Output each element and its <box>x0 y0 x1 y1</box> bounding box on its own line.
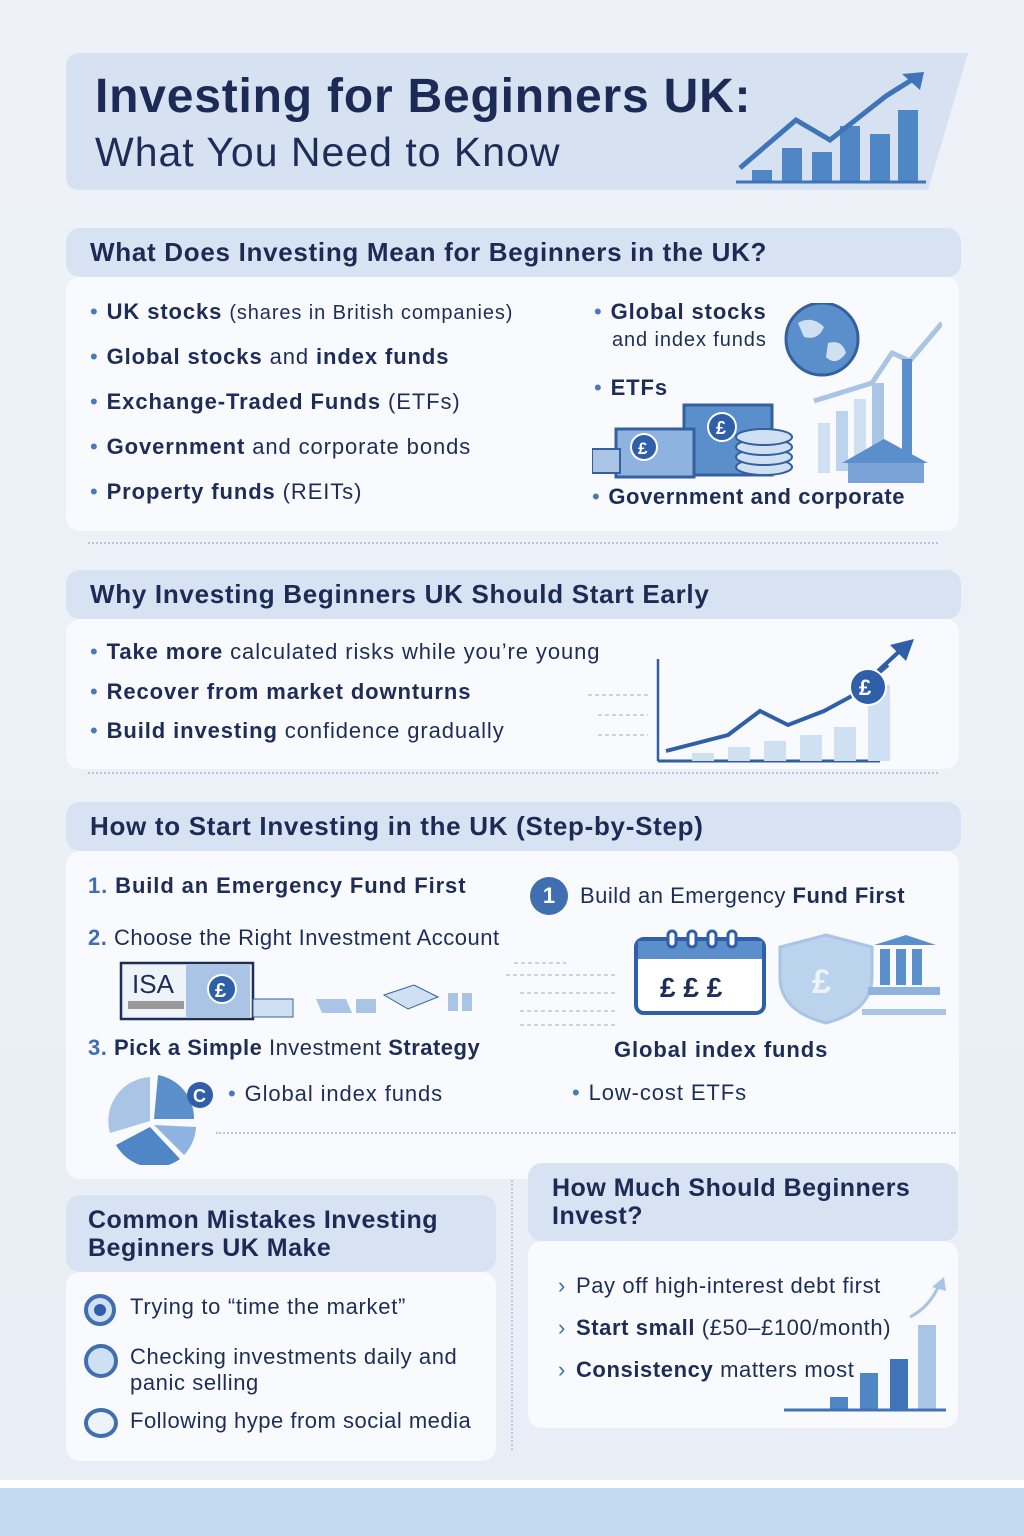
bullet list: • Take more calculated risks while you’re young <box>90 639 600 664</box>
bullet list: • Build investing confidence gradually <box>90 718 505 743</box>
bullet list: • UK stocks (shares in British companies) <box>90 299 513 324</box>
icon: calendar, shield, bank: £ <box>812 963 831 1001</box>
icon: clock <box>84 1344 118 1378</box>
panel: mistakes list: panic selling <box>130 1370 259 1395</box>
step 3: 3. Pick a Simple Investment Strategy <box>88 1035 480 1060</box>
illustration: globe, cash, bank: £ <box>638 439 648 458</box>
icon: bar chart <box>784 1277 946 1412</box>
bullet list: • Recover from market downturns <box>90 679 471 704</box>
bullet list <box>90 639 600 743</box>
step 1 badge <box>530 877 905 915</box>
section 1 header: What Does Investing Mean for Beginners in the UK? <box>90 237 767 267</box>
section 2 header: Why Investing Beginners UK Should Start Early <box>90 579 709 609</box>
panel: how much list: › Start small (£50–£100/month) <box>558 1315 891 1340</box>
how much header: How Much Should Beginners <box>552 1174 910 1202</box>
panel: mistakes list: Following hype from social media <box>130 1408 471 1433</box>
icon: eye <box>84 1294 116 1326</box>
panel: investing meaning: • ETFs <box>594 375 668 400</box>
how much header: Invest? <box>552 1202 643 1230</box>
illustration: globe, cash, bank: £ <box>716 418 726 438</box>
icon: calendar, shield, bank: £ £ £ <box>660 972 723 1003</box>
right labels: • Global stocks <box>594 299 767 324</box>
mistakes header <box>66 1195 496 1272</box>
panel: steps <box>66 851 959 1179</box>
step 1: 1. Build an Emergency Fund First <box>88 873 466 898</box>
growth chart: £ <box>859 675 872 700</box>
icon: pie chart <box>108 1075 213 1165</box>
icon: ISA card: £ <box>215 980 226 1002</box>
panel: mistakes list: Trying to “time the market” <box>130 1294 406 1319</box>
icon: ISA card: ISA <box>132 969 175 999</box>
icon: chat <box>84 1408 118 1438</box>
footer band <box>0 1480 1024 1488</box>
title: Investing for Beginners UK: <box>95 70 751 123</box>
section 3 header <box>66 802 961 851</box>
panel: steps: • Low-cost ETFs <box>572 1080 747 1105</box>
section 4: mistakes <box>66 1195 496 1461</box>
bullet list: • Property funds (REITs) <box>90 479 362 504</box>
how much header <box>528 1163 958 1241</box>
icon: pie chart: C <box>193 1086 206 1106</box>
section 5: how much <box>528 1163 958 1428</box>
step 2: 2. Choose the Right Investment Account <box>88 925 500 950</box>
panel: mistakes list: Checking investments daily and <box>130 1344 457 1369</box>
icon: calendar, shield, bank <box>506 930 946 1026</box>
section 1 header <box>66 228 961 277</box>
mistakes header: Common Mistakes Investing <box>88 1206 438 1234</box>
step 1 badge: Build an Emergency Fund First <box>580 883 905 908</box>
title panel <box>66 53 968 190</box>
growth chart <box>588 639 914 762</box>
panel: mistakes list <box>66 1272 496 1461</box>
subtitle: What You Need to Know <box>95 129 560 175</box>
panel: start early <box>66 619 959 769</box>
mistakes header: Beginners UK Make <box>88 1234 331 1262</box>
bullet list <box>90 299 513 504</box>
icon: growth chart <box>736 72 926 184</box>
bullet list: • Exchange-Traded Funds (ETFs) <box>90 389 461 414</box>
panel: investing meaning: • Government and corporate <box>592 484 905 509</box>
panel: steps: Global index funds <box>614 1037 828 1062</box>
panel: steps: • Global index funds <box>228 1081 443 1106</box>
bullet list: • Government and corporate bonds <box>90 434 471 459</box>
icon: ISA card <box>120 962 472 1020</box>
panel: investing meaning: and index funds <box>612 329 767 351</box>
step 1 badge: 1 <box>543 883 555 908</box>
section 3 header: How to Start Investing in the UK (Step-by-Step) <box>90 811 704 841</box>
panel: investing meaning <box>66 277 959 531</box>
section 2 header <box>66 570 961 619</box>
panel: how much list <box>528 1241 958 1428</box>
bullet list: • Global stocks and index funds <box>90 344 449 369</box>
panel: how much list: › Pay off high-interest debt first <box>558 1273 881 1298</box>
panel: how much list: › Consistency matters most <box>558 1357 854 1382</box>
illustration: globe, cash, bank <box>592 303 942 483</box>
